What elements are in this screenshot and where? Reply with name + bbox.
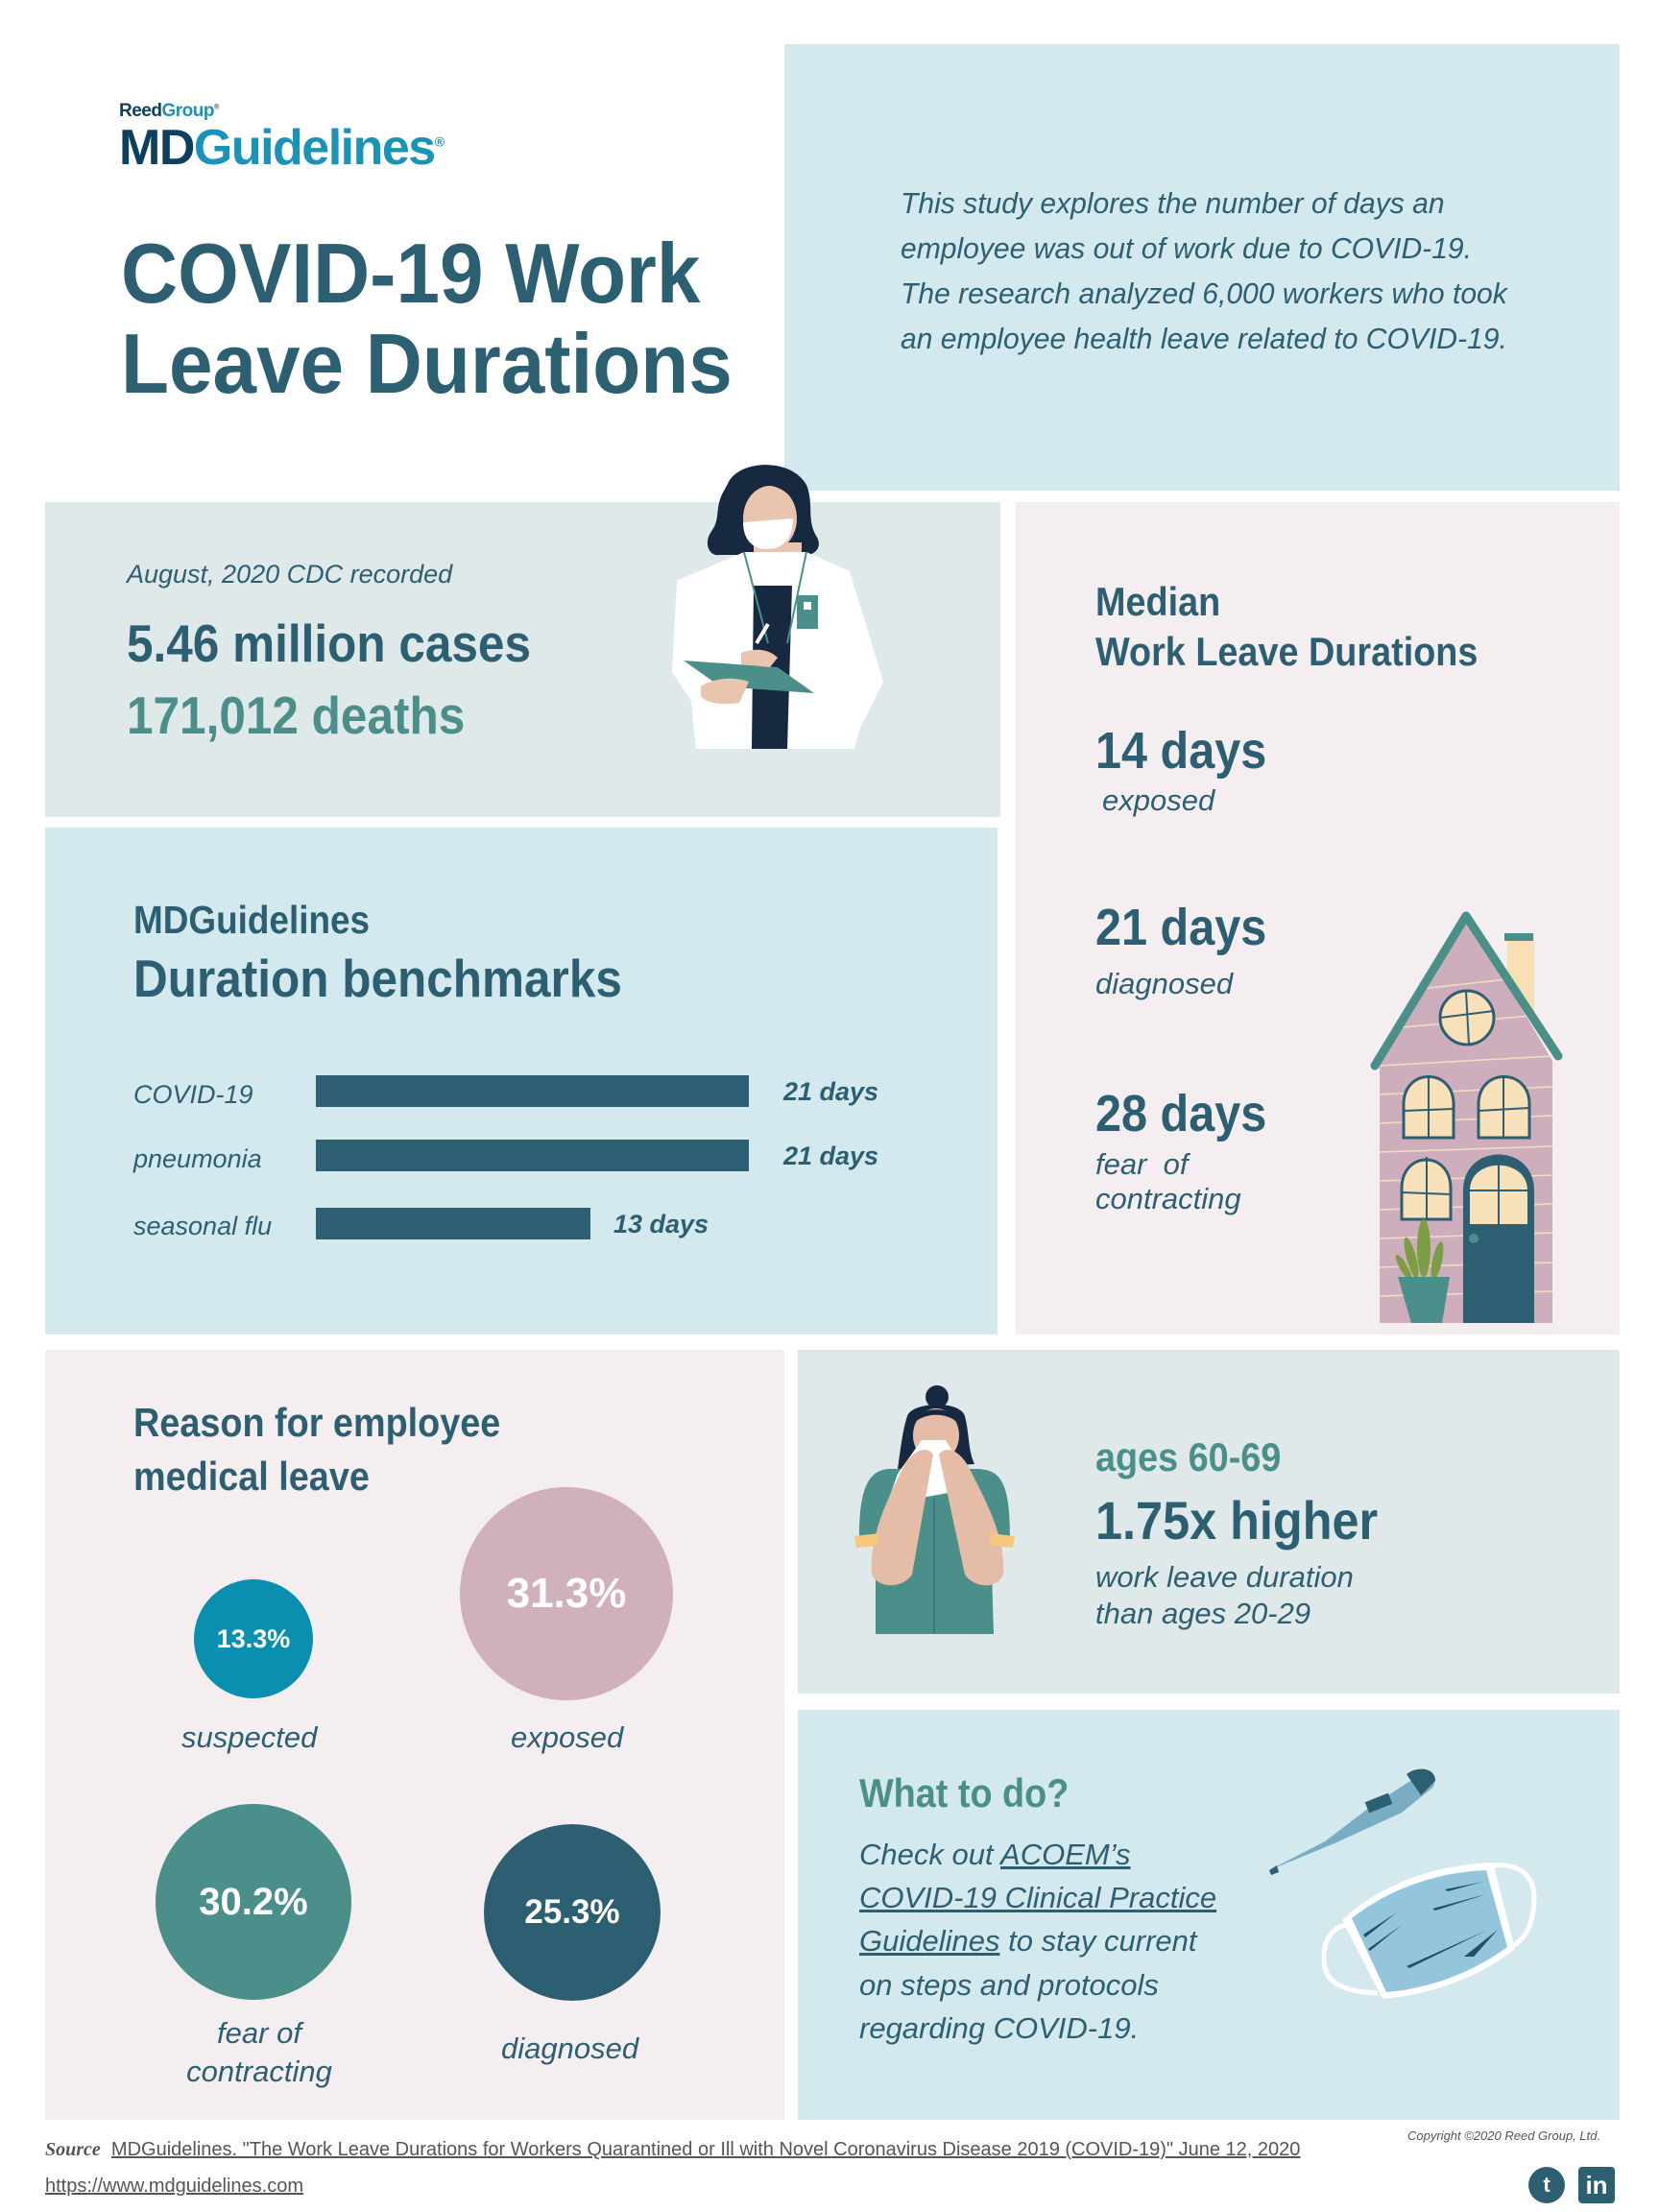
panel: what to do <box>798 1710 1620 2120</box>
panel: reason: exposed <box>511 1720 623 1754</box>
panel: median <box>1016 502 1620 1334</box>
icon: linkedin <box>1578 2167 1615 2203</box>
panel: ages <box>798 1350 1620 1694</box>
icon: twitter: t <box>1543 2173 1551 2197</box>
title <box>121 226 733 411</box>
title: Leave Durations <box>121 316 733 411</box>
description: work leave duration <box>1095 1560 1354 1594</box>
stat 21 days: 21 days <box>1095 899 1266 956</box>
panel: median: fear of <box>1095 1147 1189 1181</box>
cdc label: August, 2020 CDC recorded <box>127 560 452 589</box>
intro text: an employee health leave related to COVID-19. <box>901 322 1507 355</box>
body text: COVID-19 Clinical Practice <box>859 1881 1216 1914</box>
title: COVID-19 Work <box>121 226 700 321</box>
circle: diagnosed: 25.3% <box>524 1893 620 1931</box>
panel: reason <box>45 1350 784 2120</box>
panel: median: exposed <box>1102 783 1214 817</box>
circle: exposed: 31.3% <box>507 1570 626 1617</box>
icon: sneezing woman <box>854 1385 1015 1634</box>
icon: thermometer and mask <box>1269 1768 1536 1999</box>
icon: house <box>1371 912 1563 1323</box>
bar chart: 13 days <box>613 1210 709 1238</box>
heading <box>133 1400 500 1499</box>
icon: doctor <box>672 465 883 749</box>
circle: exposed <box>460 1487 673 1700</box>
circle: diagnosed <box>484 1824 661 2001</box>
bar chart: COVID-19 <box>133 1080 253 1109</box>
logo: MDGuidelines® <box>119 120 444 176</box>
heading <box>1095 579 1478 674</box>
circle: suspected <box>194 1579 313 1698</box>
body text: Guidelines to stay current <box>859 1924 1197 1958</box>
multiplier: 1.75x higher <box>1095 1490 1378 1551</box>
body text: Check out ACOEM’s <box>859 1838 1131 1871</box>
body text <box>859 1838 1217 2045</box>
description <box>1095 1560 1354 1630</box>
panel: reason: suspected <box>181 1720 317 1754</box>
icon: linkedin: in <box>1585 2171 1608 2200</box>
panel: intro <box>784 44 1620 491</box>
heading: What to do? <box>859 1770 1069 1815</box>
circle: fear: 30.2% <box>199 1880 308 1922</box>
stat 14 days: 14 days <box>1095 722 1266 780</box>
bar chart <box>132 1075 878 1240</box>
circle: suspected: 13.3% <box>217 1624 290 1653</box>
ages label: ages 60-69 <box>1095 1434 1281 1479</box>
heading small: MDGuidelines <box>133 898 370 942</box>
bar chart: seasonal flu <box>133 1212 272 1240</box>
panel: median: contracting <box>1095 1182 1241 1215</box>
heading: Reason for employee <box>133 1400 500 1445</box>
intro text: employee was out of work due to COVID-19. <box>901 231 1472 265</box>
panel: reason: contracting <box>186 2055 332 2088</box>
footer: source <box>45 2139 1300 2197</box>
panel: cases <box>45 502 1000 817</box>
intro text <box>901 186 1508 355</box>
footer: source: Source MDGuidelines. "The Work Leave Durations for Workers Quarantined or Ill with Novel Coronavirus Disease 2019 (COVID-19)" June 12, 2020 <box>45 2139 1300 2160</box>
stat 28 days: 28 days <box>1095 1085 1266 1142</box>
panel: reason: diagnosed <box>501 2032 638 2065</box>
body text: regarding COVID-19. <box>859 2011 1139 2045</box>
deaths number: 171,012 deaths <box>127 685 465 745</box>
heading: medical leave <box>133 1454 370 1499</box>
circle: fear <box>156 1804 351 2000</box>
heading: Median <box>1095 579 1220 624</box>
icon: twitter <box>1528 2167 1565 2203</box>
intro text: The research analyzed 6,000 workers who took <box>901 276 1507 310</box>
heading large: Duration benchmarks <box>133 949 622 1008</box>
body text: on steps and protocols <box>859 1968 1159 2002</box>
footer: source: https://www.mdguidelines.com <box>45 2176 303 2197</box>
panel: benchmarks: 21 days <box>783 1142 878 1170</box>
panel: benchmarks: 21 days <box>783 1077 878 1106</box>
copyright: Copyright ©2020 Reed Group, Ltd. <box>1407 2128 1600 2143</box>
heading: Work Leave Durations <box>1095 629 1478 674</box>
panel: reason: fear of <box>217 2016 301 2050</box>
logo: ReedGroup® <box>119 101 219 121</box>
cases number: 5.46 million cases <box>127 613 531 673</box>
panel: benchmarks <box>45 828 998 1334</box>
bar chart: pneumonia <box>133 1144 262 1173</box>
description: than ages 20-29 <box>1095 1597 1310 1630</box>
intro text: This study explores the number of days an <box>901 186 1445 220</box>
panel: median: diagnosed <box>1095 967 1233 1000</box>
